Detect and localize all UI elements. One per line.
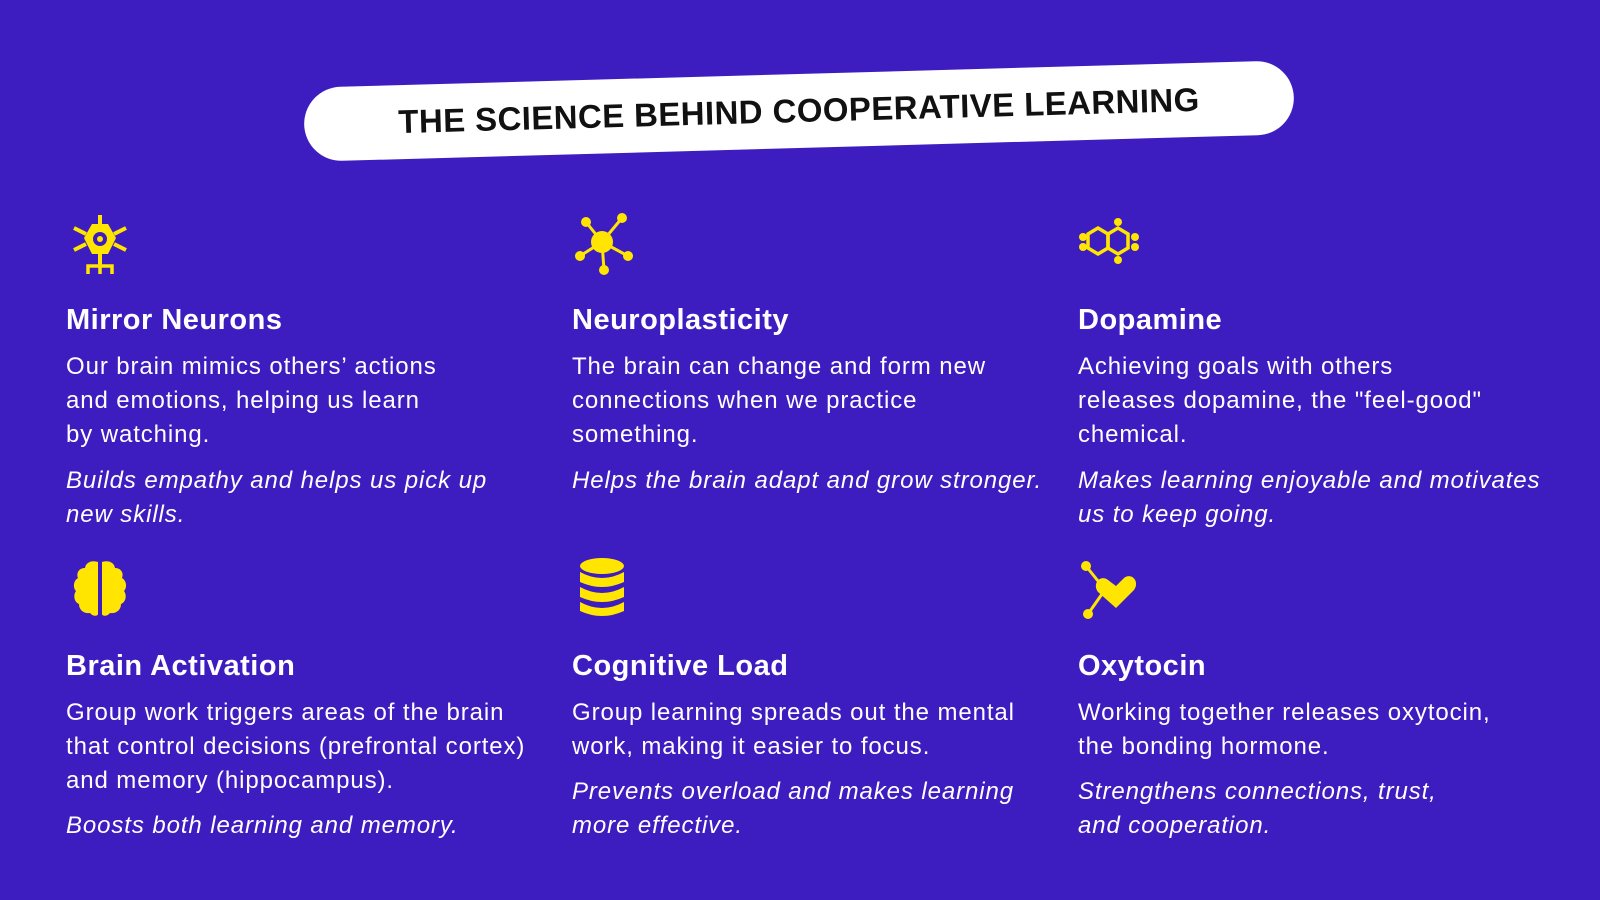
body text xyxy=(66,699,525,794)
body text: the bonding hormone. xyxy=(1078,733,1330,760)
body text: The brain can change and form new xyxy=(572,353,986,380)
body text xyxy=(1078,353,1482,448)
italic note xyxy=(1078,778,1437,839)
italic note: more effective. xyxy=(572,812,743,839)
body text: connections when we practice xyxy=(572,387,917,414)
body text: Group learning spreads out the mental xyxy=(572,699,1015,726)
body text: that control decisions (prefrontal cortex) xyxy=(66,733,525,760)
italic note xyxy=(1078,467,1540,528)
body text: and emotions, helping us learn xyxy=(66,387,420,414)
heading: Dopamine xyxy=(1078,304,1222,336)
heading: Cognitive Load xyxy=(572,650,788,682)
body text xyxy=(1078,699,1491,760)
body text xyxy=(572,353,986,448)
icon: stack xyxy=(580,558,624,616)
panel: dopamine xyxy=(1078,218,1540,528)
italic note: Builds empathy and helps us pick up xyxy=(66,467,487,494)
body text xyxy=(572,699,1015,760)
title xyxy=(303,60,1295,162)
icon: neuron xyxy=(73,215,127,274)
italic note: us to keep going. xyxy=(1078,501,1276,528)
heading: Brain Activation xyxy=(66,650,295,682)
panel: cognitive load xyxy=(572,558,1015,839)
body text: chemical. xyxy=(1078,421,1187,448)
italic note xyxy=(572,778,1014,839)
body text: and memory (hippocampus). xyxy=(66,767,394,794)
title: THE SCIENCE BEHIND COOPERATIVE LEARNING xyxy=(398,81,1200,140)
heading: Mirror Neurons xyxy=(66,304,282,336)
italic note xyxy=(66,467,487,528)
italic note: Boosts both learning and memory. xyxy=(66,812,459,839)
panel: mirror neurons xyxy=(66,215,487,528)
body text: releases dopamine, the "feel-good" xyxy=(1078,387,1482,414)
italic note: Makes learning enjoyable and motivates xyxy=(1078,467,1540,494)
body text: Achieving goals with others xyxy=(1078,353,1393,380)
panel: neuroplasticity xyxy=(572,213,1042,494)
body text: something. xyxy=(572,421,698,448)
italic note: Helps the brain adapt and grow stronger. xyxy=(572,467,1042,494)
icon: molecule xyxy=(1079,218,1139,264)
body text xyxy=(66,353,437,448)
italic note: Strengthens connections, trust, xyxy=(1078,778,1437,805)
body text: by watching. xyxy=(66,421,210,448)
heading: Neuroplasticity xyxy=(572,304,789,336)
panel: oxytocin xyxy=(1078,561,1491,839)
body text: Working together releases oxytocin, xyxy=(1078,699,1491,726)
body text: work, making it easier to focus. xyxy=(572,733,930,760)
italic note: Prevents overload and makes learning xyxy=(572,778,1014,805)
italic note: new skills. xyxy=(66,501,185,528)
icon: heart link xyxy=(1081,561,1136,619)
italic note: and cooperation. xyxy=(1078,812,1271,839)
body text: Group work triggers areas of the brain xyxy=(66,699,504,726)
icon: brain xyxy=(74,561,126,616)
icon: network xyxy=(575,213,633,275)
heading: Oxytocin xyxy=(1078,650,1206,682)
panel: brain activation xyxy=(66,561,525,839)
body text: Our brain mimics others’ actions xyxy=(66,353,437,380)
